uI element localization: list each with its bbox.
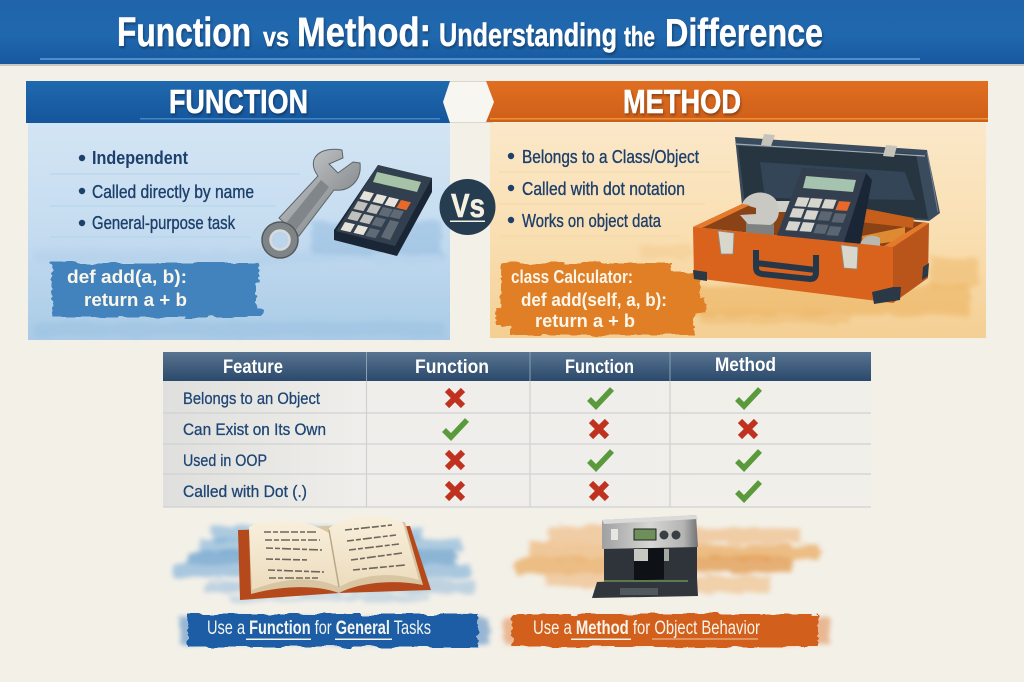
title text: Function [117, 9, 251, 55]
icon: open book [238, 516, 431, 600]
title text [117, 9, 823, 55]
icon: toolbox [693, 134, 940, 304]
method bullets: Called with dot notation [522, 179, 685, 199]
vs badge [440, 179, 496, 235]
method bullets [508, 147, 699, 231]
title text: Method: [297, 9, 431, 55]
function header: FUNCTION [169, 83, 308, 120]
row: belongs to an object [183, 389, 760, 408]
table header: Feature [223, 357, 283, 378]
function code block [52, 263, 262, 317]
orange brush behind coffee machine [515, 525, 820, 593]
table header: Function [415, 357, 489, 378]
calculator in box [776, 168, 872, 245]
table rows background [163, 381, 871, 507]
row: belongs to an object: Belongs to an Object [183, 389, 320, 408]
row: can exist on its own: Can Exist on Its Own [183, 420, 326, 439]
icon: calculator [334, 165, 432, 256]
title text: Difference [665, 12, 823, 55]
row: called with dot [183, 482, 760, 501]
icon: wrench [262, 149, 360, 258]
row: can exist on its own [183, 420, 756, 439]
method code block [496, 263, 705, 335]
table header: Function [565, 357, 634, 378]
table header: Method [715, 355, 776, 376]
callout: method use [504, 614, 830, 647]
vs badge: Vs [451, 187, 485, 224]
row: used in oop: Used in OOP [183, 451, 267, 470]
function bullets: General-purpose task [92, 213, 236, 233]
row: used in oop [183, 451, 760, 470]
toolbox lid [735, 134, 940, 221]
gap between the panel headers [443, 81, 493, 123]
method code block: class Calculator: [511, 266, 633, 287]
method header: METHOD [623, 83, 741, 120]
tool orange bar and tape [860, 208, 914, 247]
callout: function use: Use a Function for General Tasks [207, 618, 431, 639]
function code block: def add(a, b): [67, 266, 187, 287]
method code block: def add(self, a, b): [521, 289, 667, 310]
table header [163, 352, 871, 381]
title text: the [624, 21, 655, 52]
function bullets: Independent [92, 148, 188, 168]
latches [718, 231, 858, 269]
panel: function [26, 81, 450, 340]
method header [486, 81, 988, 122]
function header [26, 81, 450, 123]
box interior [693, 204, 929, 247]
callout: method use: Use a Method for Object Behavior [533, 618, 761, 639]
method bullets: Belongs to a Class/Object [522, 147, 699, 167]
blue brush behind book [173, 527, 475, 601]
icon: coffee machine [592, 515, 698, 598]
title text: Understanding [439, 17, 617, 53]
panel: method [486, 81, 988, 338]
row: called with dot: Called with Dot (.) [183, 482, 307, 501]
callout: function use [180, 614, 488, 647]
function code block: return a + b [84, 289, 187, 310]
tool wrench in box [740, 193, 790, 246]
handle [756, 250, 816, 279]
method code block: return a + b [535, 310, 635, 331]
title banner [0, 0, 1024, 66]
title text: vs [263, 22, 289, 52]
method bullets: Works on object data [522, 211, 662, 231]
comparison table [163, 352, 871, 507]
box body [693, 204, 929, 304]
function bullets: Called directly by name [92, 182, 254, 202]
function bullets [79, 148, 254, 233]
